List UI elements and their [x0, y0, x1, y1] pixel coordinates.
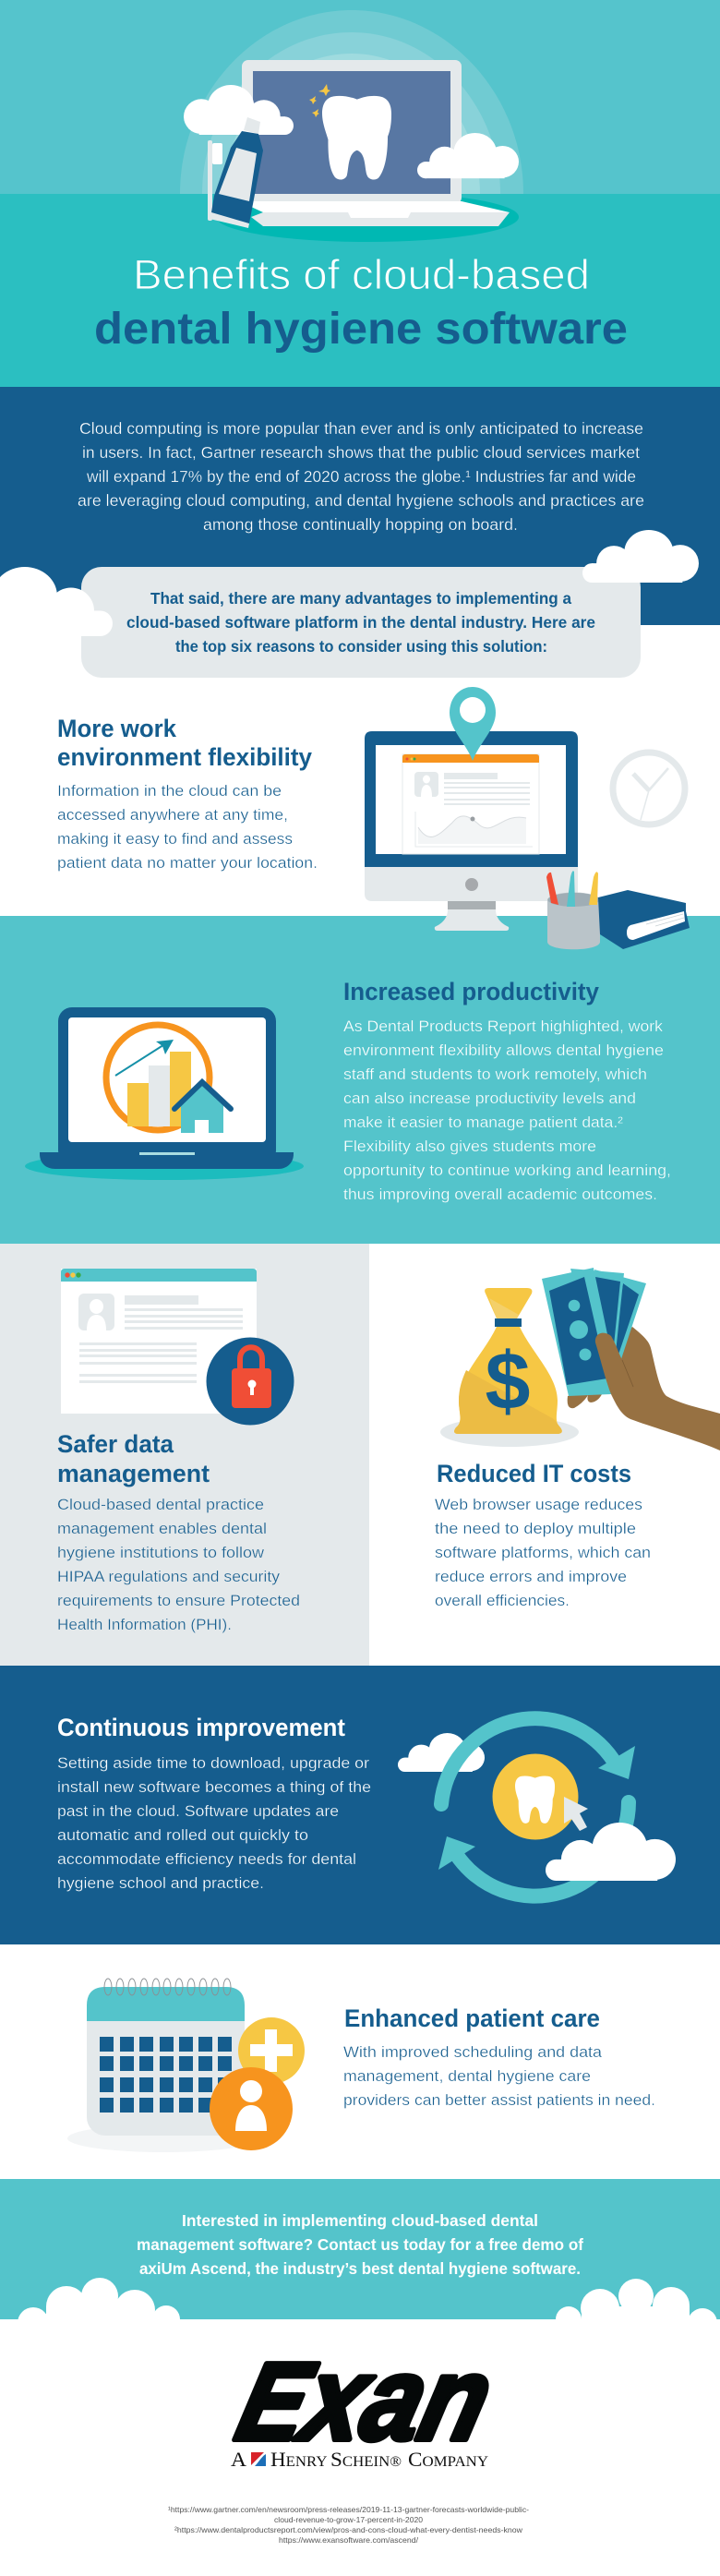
body text	[57, 1496, 300, 1633]
tagline: A	[231, 2448, 246, 2471]
callout box: the top six reasons to consider using this solution:	[175, 637, 547, 656]
body text: staff and students to work remotely, which	[343, 1065, 647, 1083]
intro text: are leveraging cloud computing, and dental hygiene schools and practices are	[78, 491, 644, 510]
body text: make it easier to manage patient data.²	[343, 1113, 623, 1131]
icon: toothpaste tube	[211, 117, 263, 223]
icon: tooth on yellow circle	[493, 1754, 578, 1839]
tagline: COMPANY	[408, 2448, 488, 2471]
intro text	[78, 419, 644, 534]
body text: making it easy to find and assess	[57, 830, 293, 848]
tagline	[231, 2448, 488, 2471]
panel background	[0, 916, 720, 1244]
laptop shadow	[25, 1152, 304, 1180]
body text: As Dental Products Report highlighted, work	[343, 1017, 664, 1035]
panel background	[0, 1244, 369, 1666]
body text: the need to deploy multiple	[435, 1520, 636, 1537]
clouds: bottom left	[18, 2278, 180, 2339]
icon: cursor	[564, 1797, 588, 1831]
illustration: calendar	[67, 1979, 305, 2152]
footnotes: ¹https://www.gartner.com/en/newsroom/press-releases/2019-11-13-gartner-forecasts-worldwide-public-	[168, 2505, 529, 2514]
body text: automatic and rolled out quickly to	[57, 1826, 308, 1844]
cloud: intro right	[582, 530, 699, 583]
banknotes	[542, 1268, 646, 1396]
heading: Enhanced patient care	[344, 2004, 600, 2032]
intro text: among those continually hopping on board.	[203, 515, 518, 534]
body text: Health Information (PHI).	[57, 1616, 232, 1633]
browser window	[402, 754, 539, 854]
panel: call to action	[0, 2179, 720, 2339]
call to action text: management software? Contact us today for a free demo of	[137, 2235, 583, 2254]
body text	[57, 1754, 371, 1892]
body text: software platforms, which can	[435, 1544, 651, 1561]
body text: overall efficiencies.	[435, 1592, 570, 1609]
icon: patient	[210, 2067, 293, 2150]
chart ring	[106, 1025, 210, 1130]
hero sky	[0, 0, 720, 194]
bars	[127, 1052, 191, 1126]
intro text: will expand 17% by the end of 2020 across the globe.¹ Industries far and wide	[86, 467, 636, 486]
body text: can also increase productivity levels and	[343, 1089, 636, 1107]
callout box	[81, 567, 641, 678]
panel background	[0, 1666, 720, 1944]
browser window	[61, 1269, 257, 1414]
body text: install new software becomes a thing of the	[57, 1778, 371, 1796]
panel: safer data management	[0, 1244, 369, 1666]
body text: Flexibility also gives students more	[343, 1138, 596, 1155]
body text: accessed anywhere at any time,	[57, 806, 288, 824]
clouds: bottom right	[556, 2279, 717, 2338]
title: Benefits of cloud-based	[133, 251, 590, 298]
wordmark: Exan	[226, 2332, 505, 2465]
body text: requirements to ensure Protected	[57, 1592, 300, 1609]
body text: hygiene school and practice.	[57, 1874, 264, 1892]
icon: location pin	[450, 687, 496, 761]
panel: increased productivity	[0, 871, 720, 1244]
body text: reduce errors and improve	[435, 1568, 627, 1585]
illustration: money bag: $	[486, 1335, 530, 1426]
body text: opportunity to continue working and learning,	[343, 1162, 671, 1179]
icon: clock	[613, 752, 685, 825]
call to action text: Interested in implementing cloud-based dental	[182, 2211, 538, 2230]
body text: environment flexibility allows dental hygiene	[343, 1041, 664, 1059]
footnotes: ²https://www.dentalproductsreport.com/view/pros-and-cons-cloud-what-every-dentist-needs-know	[174, 2525, 523, 2534]
heading: environment flexibility	[57, 743, 312, 771]
panel: hero	[0, 0, 720, 387]
panel: reduced IT costs	[435, 1268, 720, 1609]
body text: providers can better assist patients in need.	[343, 2091, 655, 2109]
monitor	[365, 731, 578, 901]
body text	[57, 782, 318, 872]
illustration: money bag	[440, 1288, 579, 1447]
calendar grid	[100, 2037, 232, 2113]
panel: introduction	[0, 387, 720, 678]
body text: Information in the cloud can be	[57, 782, 282, 800]
thumb	[595, 1333, 637, 1394]
body text: past in the cloud. Software updates are	[57, 1802, 339, 1820]
laptop illustration	[25, 1007, 304, 1180]
icon: Henry Schein flag	[251, 2452, 266, 2466]
heading: Increased productivity	[343, 978, 599, 1005]
hero floor	[0, 194, 720, 387]
heading: Reduced IT costs	[437, 1460, 631, 1487]
body text: accommodate efficiency needs for dental	[57, 1850, 356, 1868]
body text	[435, 1496, 651, 1609]
icon: sparkles	[309, 84, 330, 117]
callout box: cloud-based software platform in the dental industry. Here are	[126, 613, 595, 632]
panel: continuous improvement	[0, 1666, 720, 1944]
body text: HIPAA regulations and security	[57, 1568, 281, 1585]
icon: medical plus	[238, 2017, 305, 2084]
pencil cup	[546, 871, 600, 949]
growth arrow	[115, 1040, 174, 1076]
call to action text	[137, 2211, 583, 2278]
laptop shadow	[216, 192, 519, 242]
icon: tooth	[322, 96, 391, 180]
book	[598, 890, 690, 949]
body text: management, dental hygiene care	[343, 2067, 591, 2085]
cloud: intro left	[0, 567, 113, 636]
panel background	[0, 2179, 720, 2319]
panel: more work environment flexibility	[57, 687, 685, 901]
icon: toothbrush	[208, 140, 249, 228]
body text	[343, 2043, 655, 2109]
heading: More work	[57, 715, 177, 742]
calendar page	[87, 1987, 245, 2136]
footnotes	[168, 2505, 529, 2545]
intro text: Cloud computing is more popular than ever and is only anticipated to increase	[79, 419, 643, 438]
icon: padlock	[207, 1337, 294, 1426]
heading: management	[57, 1460, 210, 1487]
icon: house	[174, 1082, 231, 1133]
footnotes: https://www.exansoftware.com/ascend/	[279, 2535, 419, 2545]
cloud: cycle right	[546, 1823, 676, 1881]
laptop	[40, 1007, 294, 1169]
cloud: cycle left	[398, 1733, 485, 1772]
heading	[57, 715, 312, 771]
title	[94, 251, 628, 354]
laptop illustration	[242, 60, 510, 226]
body text: thus improving overall academic outcomes.	[343, 1186, 657, 1203]
heading: Safer data	[57, 1430, 174, 1458]
body text	[343, 1017, 671, 1203]
intro background	[0, 387, 720, 625]
cloud: hero left	[184, 85, 294, 135]
heading: Continuous improvement	[57, 1714, 345, 1741]
calendar shadow	[67, 2125, 259, 2152]
arrows: update cycle	[438, 1718, 635, 1896]
fingers	[568, 1390, 604, 1408]
body text: Cloud-based dental practice	[57, 1496, 264, 1513]
panel: enhanced patient care	[67, 1979, 655, 2152]
intro text: in users. In fact, Gartner research shows that the public cloud services market	[82, 443, 640, 462]
monitor stand	[435, 901, 509, 931]
hand	[609, 1327, 720, 1451]
body text: Setting aside time to download, upgrade or	[57, 1754, 369, 1772]
calendar rings	[104, 1979, 231, 1995]
body text: Web browser usage reduces	[435, 1496, 642, 1513]
footnotes: cloud-revenue-to-grow-17-percent-in-2020	[274, 2515, 423, 2524]
call to action text: axiUm Ascend, the industry’s best dental hygiene software.	[139, 2259, 581, 2278]
body text: hygiene institutions to follow	[57, 1544, 265, 1561]
thumb crease	[622, 1360, 633, 1387]
body text: management enables dental	[57, 1520, 267, 1537]
title: dental hygiene software	[94, 305, 628, 354]
cloud: hero right	[417, 133, 519, 178]
hero glow arcs	[180, 10, 523, 194]
heading	[57, 1430, 210, 1487]
calendar header	[87, 1987, 245, 2021]
tagline: HENRY SCHEIN®	[270, 2448, 402, 2471]
body text: With improved scheduling and data	[343, 2043, 603, 2061]
logo: Exan	[226, 2332, 505, 2471]
illustration: hand holding money	[542, 1268, 720, 1451]
callout box: That said, there are many advantages to implementing a	[150, 589, 571, 608]
body text: patient data no matter your location.	[57, 854, 318, 872]
